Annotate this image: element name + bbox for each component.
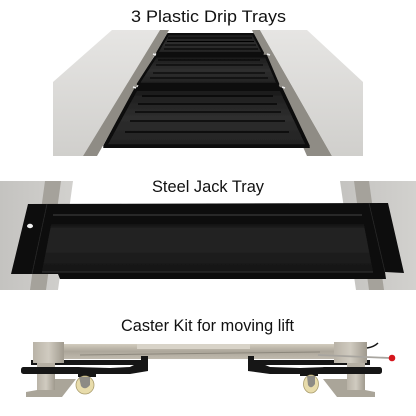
right flange crease — [369, 203, 385, 272]
right runway stripe — [354, 181, 384, 290]
red handle knob — [389, 355, 395, 361]
right runway plate — [260, 30, 363, 156]
power cable — [367, 343, 378, 348]
right lower arm — [248, 356, 382, 376]
left runway inner edge — [83, 30, 169, 156]
left caster wheel — [76, 376, 94, 394]
left lower arm — [21, 356, 148, 377]
photo: steel jack tray on lift runways — [0, 181, 416, 290]
tray floor — [42, 215, 373, 272]
left runway plate — [53, 30, 160, 156]
right caster wheel — [304, 375, 318, 393]
photo: lift with caster kit — [21, 342, 395, 397]
left post — [26, 342, 76, 397]
tray body and flanges — [11, 203, 404, 279]
tray front rim highlight — [42, 271, 373, 273]
title: caster kit: Caster Kit for moving lift — [121, 317, 294, 335]
left runway — [0, 181, 73, 290]
middle drip tray — [138, 56, 278, 84]
right runway inner edge — [252, 30, 332, 156]
tray back rim highlight — [53, 214, 362, 216]
title: plastic drip trays: 3 Plastic Drip Trays — [131, 8, 286, 26]
title: steel jack tray: Steel Jack Tray — [152, 178, 265, 196]
left runway stripe — [30, 181, 61, 290]
photo: plastic drip trays on lift runways — [53, 30, 363, 156]
left flange crease — [32, 204, 47, 274]
far drip tray — [157, 34, 263, 53]
dark backing between trays — [103, 33, 310, 148]
mounting hole — [27, 224, 33, 228]
center beam — [63, 344, 335, 359]
right runway — [340, 181, 416, 290]
right post — [323, 342, 375, 397]
near drip tray — [105, 89, 308, 146]
tray joint clips — [133, 54, 285, 88]
release handle — [318, 355, 390, 358]
